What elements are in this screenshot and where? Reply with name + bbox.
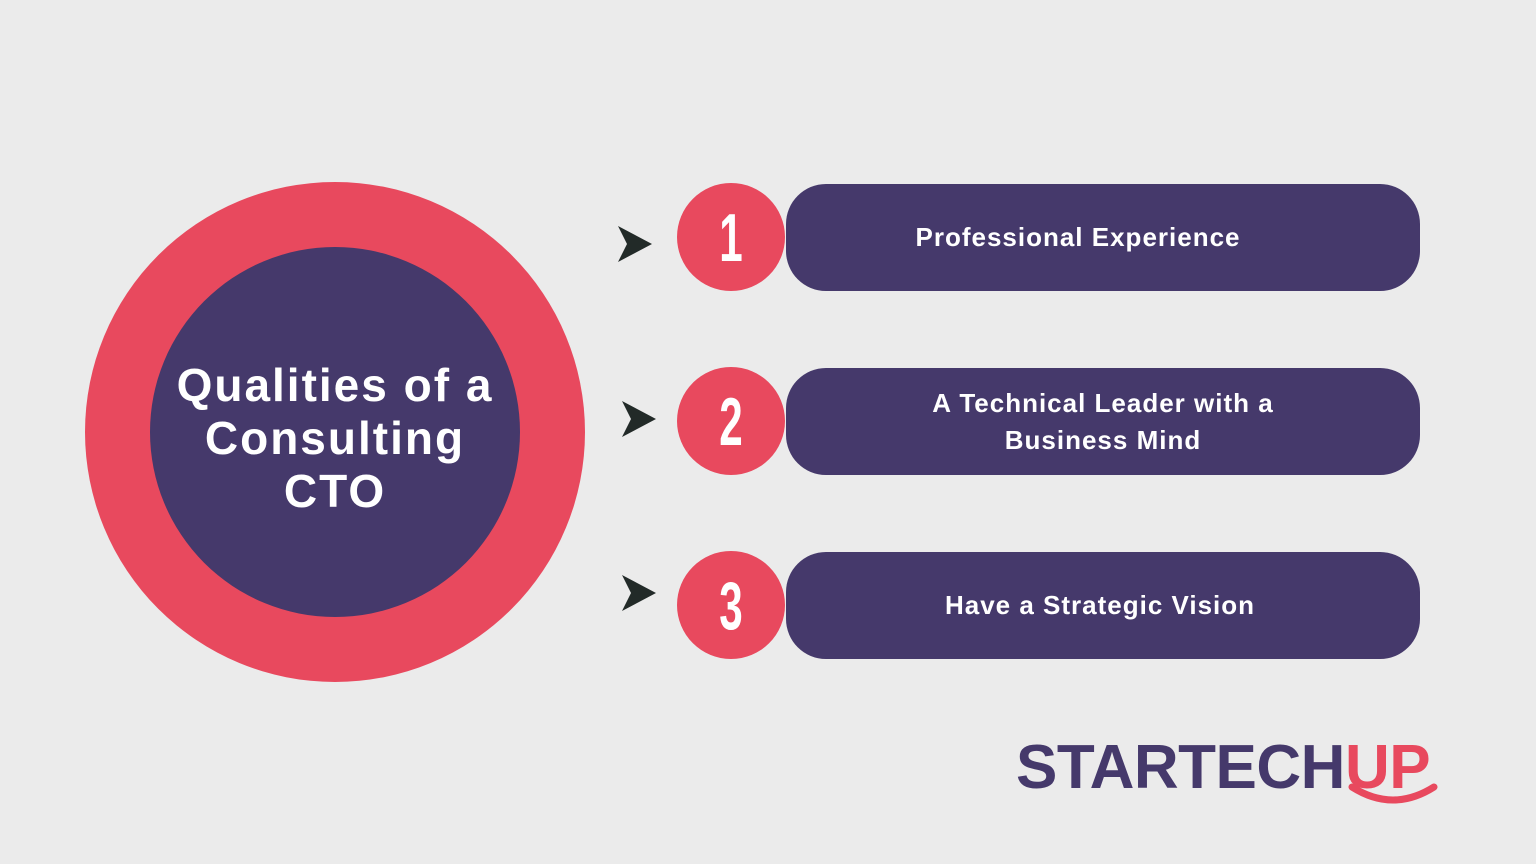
number 1 — [677, 183, 785, 291]
inner circle title — [150, 247, 520, 617]
item 3: Have a Strategic Vision — [945, 590, 1255, 620]
number 2: 2 — [719, 384, 743, 460]
inner circle title: CTO — [284, 464, 386, 516]
item 2: Business Mind — [1005, 424, 1201, 454]
number 2 — [677, 367, 785, 475]
number 3 — [677, 551, 785, 659]
inner circle title: Qualities of a — [177, 358, 493, 410]
logo: STARTECHUP — [1016, 733, 1430, 802]
arrow 3 — [622, 575, 656, 611]
item 2 — [786, 368, 1420, 475]
number 1: 1 — [719, 200, 743, 276]
item 1 — [786, 184, 1420, 291]
arrow 2 — [622, 401, 656, 437]
inner circle title: Consulting — [205, 412, 465, 464]
item 2: A Technical Leader with a — [932, 388, 1274, 418]
item 3 — [786, 552, 1420, 659]
item 1: Professional Experience — [915, 222, 1241, 252]
central circle — [85, 182, 585, 682]
arrow 1 — [618, 226, 652, 262]
number 3: 3 — [719, 568, 743, 644]
